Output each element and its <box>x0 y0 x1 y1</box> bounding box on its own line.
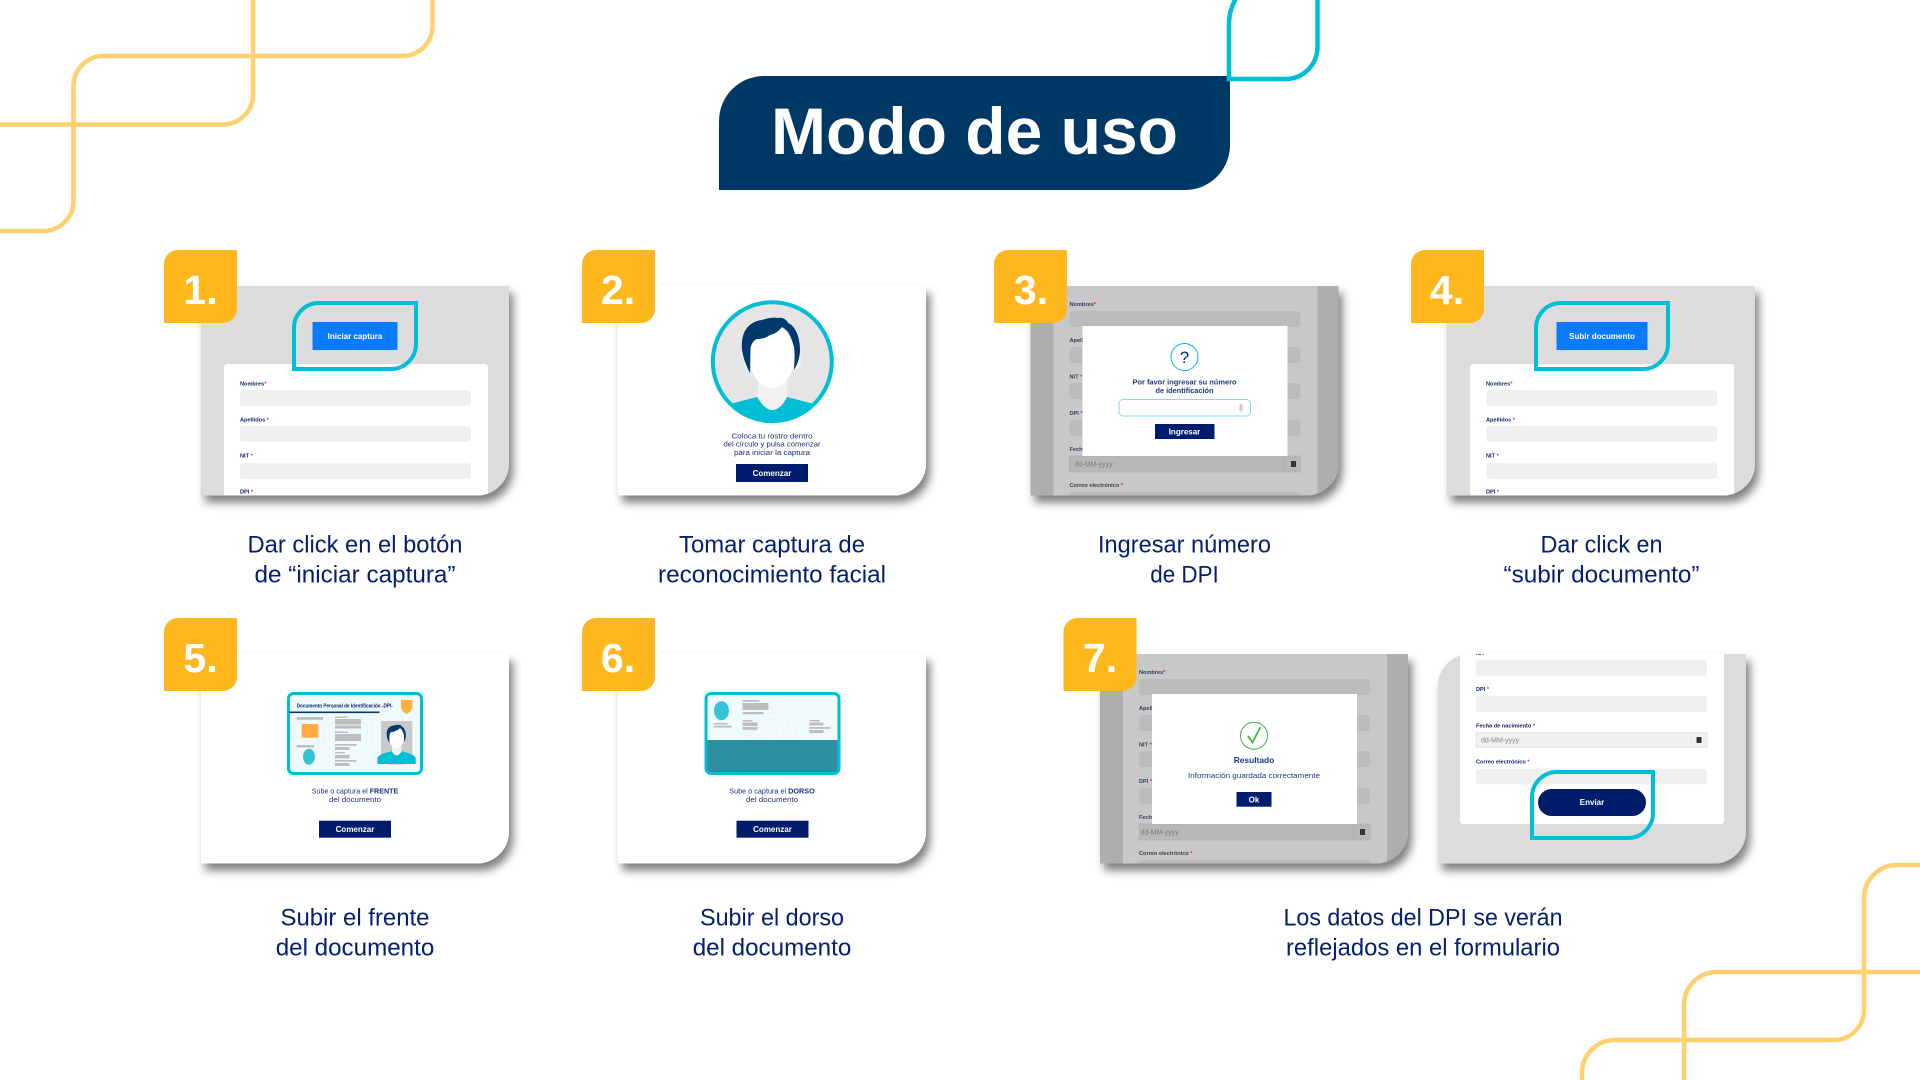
screen: ingresar DPI: NIT * <box>1070 374 1083 380</box>
button: ingresar: Ingresar <box>1169 428 1200 436</box>
badge 5: 5. <box>183 635 218 681</box>
screen: ingresar DPI: Nombres* <box>1070 302 1097 308</box>
caption 3: de DPI <box>1150 562 1219 588</box>
caption 7: Los datos del DPI se verán <box>1284 904 1562 932</box>
screen: formulario <box>1438 646 1746 864</box>
screen: formulario: Fecha de nacimiento * <box>1476 724 1536 730</box>
button: ok <box>1236 792 1272 807</box>
input field <box>1119 400 1250 416</box>
button: iniciar captura: Iniciar captura <box>328 332 383 341</box>
instructions: del documento <box>746 795 798 804</box>
button: ingresar <box>1155 424 1214 439</box>
icon: check mark <box>1240 722 1268 749</box>
screen: resultado <box>1100 654 1408 876</box>
caption 7 <box>1284 904 1562 962</box>
screen: iniciar captura: NIT * <box>240 454 254 460</box>
caption 1: de “iniciar captura” <box>254 562 456 588</box>
prompt text <box>1132 378 1237 395</box>
screen: formulario: NIT * <box>1476 651 1490 657</box>
screen: resultado: DPI * <box>1139 779 1153 785</box>
icon: ID card front: Documento Personal de Identificación -DPI- <box>297 704 393 710</box>
badge 2: 2. <box>601 267 635 313</box>
screen: ingresar DPI: Fecha <box>1070 447 1087 453</box>
caption 4: “subir documento” <box>1504 562 1700 588</box>
button: enviar: Enviar <box>1580 798 1604 807</box>
button: comenzar: Comenzar <box>753 825 792 834</box>
button: ok: Ok <box>1249 796 1260 804</box>
screen: resultado: NIT * <box>1139 742 1153 748</box>
screen: frente del documento <box>201 654 509 864</box>
panel: step 4 <box>1411 250 1755 588</box>
screen: subir documento: Apellidos * <box>1486 418 1516 424</box>
button: subir documento <box>1556 322 1648 350</box>
badge 6 <box>582 618 655 691</box>
title: Modo de uso <box>771 94 1178 168</box>
button: iniciar captura <box>312 322 398 350</box>
screen: formulario: dd-MM-yyyy <box>1481 738 1520 744</box>
instructions: del documento <box>329 795 381 804</box>
badge 3: 3. <box>1014 267 1048 313</box>
result text: Resultado <box>1234 755 1274 765</box>
screen: iniciar captura <box>201 286 509 504</box>
instructions: para iniciar la captura <box>734 448 811 457</box>
screen: subir documento: DPI * <box>1486 490 1500 496</box>
caption 5: del documento <box>276 934 434 962</box>
screen: resultado: Correo electrónico * <box>1139 851 1193 857</box>
button: comenzar <box>736 821 808 838</box>
instructions: Sube o captura el DORSO <box>729 786 815 796</box>
highlight <box>1536 303 1668 369</box>
instructions <box>729 786 815 804</box>
panel: step 6 <box>582 618 926 962</box>
badge 7: 7. <box>1083 635 1117 681</box>
instructions <box>312 786 398 804</box>
caption 3: Ingresar número <box>1098 532 1271 558</box>
panel: step 3 <box>994 250 1338 588</box>
caption 2: reconocimiento facial <box>658 562 886 588</box>
button: comenzar: Comenzar <box>753 469 791 478</box>
screen: resultado: Nombres* <box>1139 670 1166 676</box>
screen: resultado: dd-MM-yyyy <box>1140 830 1179 836</box>
caption 4: Dar click en <box>1540 532 1662 558</box>
title accent: cyan line <box>1229 0 1318 79</box>
caption 7: reflejados en el formulario <box>1286 934 1560 962</box>
highlight <box>294 303 416 369</box>
screen: ingresar DPI: dd-MM-yyyy <box>1074 462 1113 468</box>
badge 5 <box>164 618 237 691</box>
button: subir documento: Subir documento <box>1569 332 1635 341</box>
screen: ingresar DPI: Correo electrónico * <box>1070 483 1124 489</box>
panel: step 7 <box>1064 618 1746 962</box>
caption 2 <box>658 532 886 588</box>
badge 4: 4. <box>1430 267 1464 313</box>
screen: iniciar captura: Nombres* <box>240 382 267 388</box>
badge 4 <box>1411 250 1484 323</box>
icon: portrait <box>377 725 416 764</box>
prompt text: Por favor ingresar su número <box>1132 378 1237 386</box>
panel: step 2 <box>582 250 926 588</box>
title <box>719 76 1230 190</box>
button: comenzar: Comenzar <box>336 825 374 834</box>
result text <box>1188 755 1320 780</box>
caption 5: Subir el frente <box>280 904 430 932</box>
badge 1: 1. <box>183 267 218 313</box>
panel: step 1 <box>164 250 509 588</box>
screen: reconocimiento facial <box>618 286 926 496</box>
screen: resultado: Fecha <box>1139 815 1156 821</box>
badge 7 <box>1064 618 1136 691</box>
decorative lines: bottom-right <box>1582 865 1920 1080</box>
badge 1 <box>164 250 237 323</box>
button: comenzar <box>736 464 808 482</box>
caption 6: Subir el dorso <box>700 904 844 932</box>
icon: question mark: ? <box>1180 348 1189 367</box>
instructions: Coloca tu rostro dentro <box>732 431 812 440</box>
decorative lines: top-left <box>0 0 432 231</box>
badge 6: 6. <box>601 635 635 681</box>
icon: ID card front <box>288 694 422 774</box>
screen: formulario: Correo electrónico * <box>1476 760 1530 766</box>
modal: ingresar DPI <box>1082 326 1288 456</box>
screen: dorso del documento <box>618 654 926 864</box>
caption 1: Dar click en el botón <box>248 532 462 558</box>
screen: resultado: Apellidos <box>1139 706 1164 712</box>
screen: subir documento: Nombres* <box>1486 382 1513 388</box>
screen: ingresar DPI: DPI * <box>1070 411 1083 417</box>
button: enviar <box>1538 789 1646 816</box>
screen: subir documento <box>1447 286 1755 504</box>
caption 2: Tomar captura de <box>679 532 865 558</box>
result text: Información guardada correctamente <box>1188 771 1320 780</box>
screen: ingresar DPI <box>1030 286 1338 508</box>
badge 2 <box>582 250 655 323</box>
caption 1 <box>248 532 462 588</box>
prompt text: de identificación <box>1156 386 1214 395</box>
highlight <box>1532 772 1653 838</box>
screen: formulario: DPI * <box>1476 687 1490 693</box>
caption 5 <box>276 904 434 962</box>
caption 6 <box>693 904 851 962</box>
icon: face in circle <box>713 302 832 425</box>
screen: iniciar captura: Apellidos * <box>240 418 270 424</box>
screen: ingresar DPI: Apellidos <box>1070 338 1095 344</box>
caption 4 <box>1504 532 1700 588</box>
screen: subir documento: NIT * <box>1486 454 1500 460</box>
panel: step 5 <box>164 618 509 962</box>
badge 3 <box>994 250 1067 323</box>
screen: iniciar captura: DPI * <box>240 490 254 496</box>
icon: question mark <box>1171 344 1198 370</box>
instructions <box>724 431 821 457</box>
caption 3 <box>1098 532 1271 588</box>
button: comenzar <box>319 821 391 838</box>
icon: ID card back <box>706 694 839 774</box>
modal: resultado <box>1152 694 1357 824</box>
caption 6: del documento <box>693 934 851 962</box>
instructions: del círculo y pulsa comenzar <box>724 440 821 448</box>
instructions: Sube o captura el FRENTE <box>312 786 398 796</box>
